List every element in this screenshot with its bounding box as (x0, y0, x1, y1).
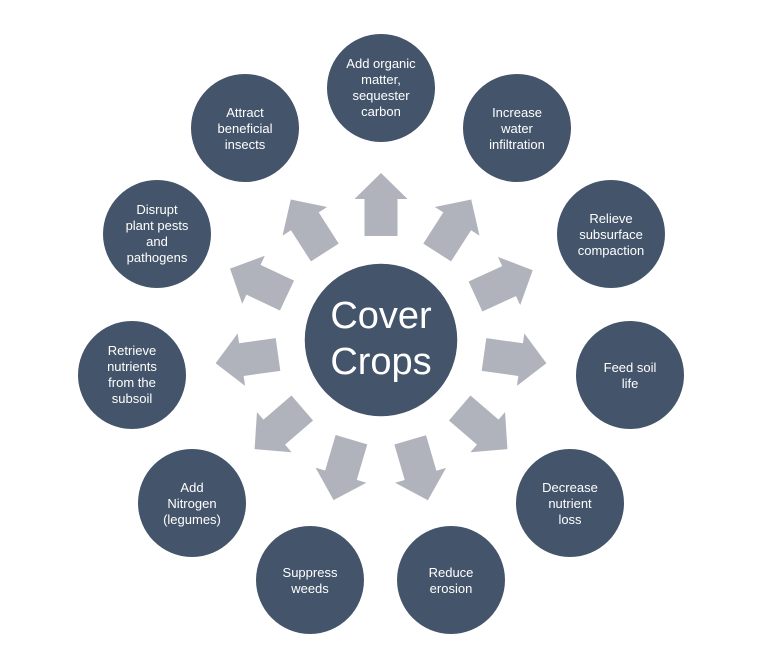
circle: Decrease nutrient loss (516, 449, 624, 557)
circle: Disrupt plant pests: and (146, 234, 168, 249)
circle: Attract beneficial insects: beneficial (218, 121, 273, 136)
circle: Add organic matter (327, 34, 435, 142)
circle: Retrieve nutrients: from the (108, 375, 156, 390)
circle: Attract beneficial insects: insects (225, 137, 266, 152)
arrows (212, 173, 550, 508)
circle: Add organic matter: Add organic (346, 56, 416, 71)
circle: Disrupt plant pests: pathogens (127, 250, 188, 265)
circle: Decrease nutrient loss: loss (558, 512, 582, 527)
circle: Suppress weeds (256, 526, 364, 634)
circle: Retrieve nutrients: nutrients (107, 359, 157, 374)
circle: Add organic matter: sequester (352, 88, 410, 103)
circle: Disrupt plant pests: Disrupt (136, 202, 178, 217)
circle: Increase water infiltration: water (500, 121, 534, 136)
circle: Disrupt plant pests: plant pests (126, 218, 189, 233)
circle: Add organic matter: matter, (361, 72, 401, 87)
circle: Add organic matter: carbon (361, 104, 401, 119)
circle: Reduce erosion (397, 526, 505, 634)
circle: Feed soil life (576, 321, 684, 429)
circle: Suppress weeds: Suppress (283, 565, 338, 580)
circle: Decrease nutrient loss: Decrease (542, 480, 598, 495)
circle: Retrieve nutrients (78, 321, 186, 429)
circle: Attract beneficial insects: Attract (226, 105, 264, 120)
center circle: Cover Crops: Crops (330, 341, 432, 383)
circle: Retrieve nutrients: Retrieve (108, 343, 156, 358)
circle: Relieve subsurface compaction: compaction (578, 243, 644, 258)
circle: Add Nitrogen: Add (180, 480, 204, 495)
circle: Reduce erosion: Reduce (429, 565, 473, 580)
circle: Feed soil life: Feed soil (604, 360, 656, 375)
circle: Suppress weeds: weeds (290, 581, 329, 596)
circle: Disrupt plant pests (103, 180, 211, 288)
circle: Reduce erosion: erosion (430, 581, 472, 596)
circle: Relieve subsurface compaction: Relieve (589, 211, 633, 226)
circle: Increase water infiltration: Increase (492, 105, 542, 120)
circle: Increase water infiltration (463, 74, 571, 182)
circle: Add Nitrogen (138, 449, 246, 557)
circle: Attract beneficial insects (191, 74, 299, 182)
circle: Relieve subsurface compaction: subsurface (579, 227, 643, 242)
circle: Add Nitrogen: Nitrogen (167, 496, 217, 511)
circle: Retrieve nutrients: subsoil (112, 391, 152, 406)
circle: Add Nitrogen: (legumes) (163, 512, 221, 527)
circle: Decrease nutrient loss: nutrient (548, 496, 592, 511)
circle: Increase water infiltration: infiltration (489, 137, 545, 152)
center circle: Cover Crops: Cover (330, 295, 432, 337)
circle: Relieve subsurface compaction (557, 180, 665, 288)
center circle: Cover Crops (304, 263, 458, 417)
circle: Feed soil life: life (622, 376, 638, 391)
